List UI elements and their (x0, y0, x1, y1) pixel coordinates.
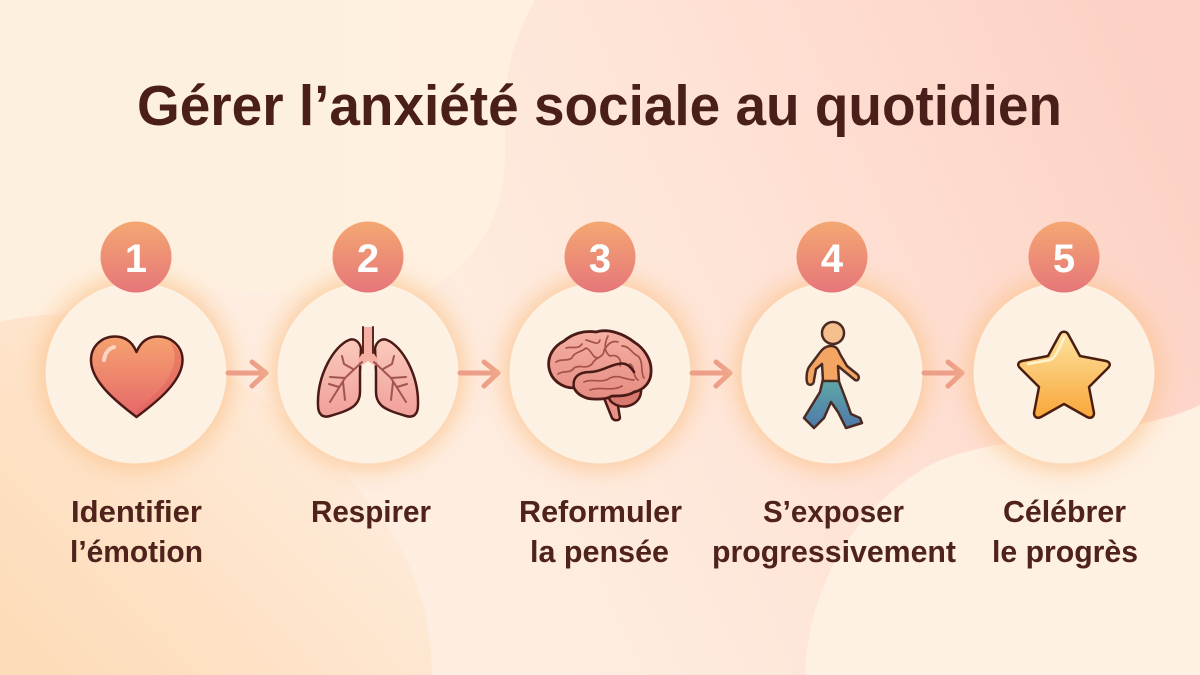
icon: brain (549, 331, 651, 420)
label 4: progressivement (712, 534, 956, 569)
circle 2 (273, 278, 463, 468)
number badge 1 (100, 222, 172, 292)
number badge 3: 3 (589, 237, 611, 281)
label 3: la pensée (530, 534, 669, 569)
title: Gérer l’anxiété sociale au quotidien (137, 74, 1062, 138)
number badge 3 (564, 222, 636, 292)
arrow 2 (460, 362, 498, 386)
number badge 1: 1 (125, 237, 147, 281)
step 1: identifier l'émotion (41, 222, 231, 569)
number badge 4 (796, 222, 868, 292)
icon: heart (91, 336, 182, 417)
circle 5 (969, 278, 1159, 468)
step 4: s'exposer progressivement (712, 222, 956, 569)
circle 3 (505, 278, 695, 468)
icon: lungs (318, 327, 418, 417)
arrow 3 (692, 362, 730, 386)
number badge 2: 2 (357, 237, 379, 281)
icon: walking person (804, 322, 862, 428)
label 1: Identifier (71, 494, 202, 529)
label 4: S’exposer (763, 494, 904, 529)
circle 4 (737, 278, 927, 468)
step 5: célébrer le progrès (969, 222, 1159, 569)
step 2: respirer (273, 222, 463, 529)
icon: star (1018, 332, 1110, 418)
label 5: Célébrer (1003, 494, 1126, 529)
number badge 5: 5 (1053, 237, 1075, 281)
label 3: Reformuler (519, 494, 682, 529)
number badge 5 (1028, 222, 1100, 292)
number badge 4: 4 (821, 237, 844, 281)
step 3: reformuler la pensée (505, 222, 695, 569)
circle 1 (41, 278, 231, 468)
arrow 1 (228, 362, 266, 386)
label 1: l’émotion (70, 534, 203, 569)
number badge 2 (332, 222, 404, 292)
arrow 4 (924, 362, 962, 386)
label 2: Respirer (311, 494, 431, 529)
label 5: le progrès (992, 534, 1138, 569)
